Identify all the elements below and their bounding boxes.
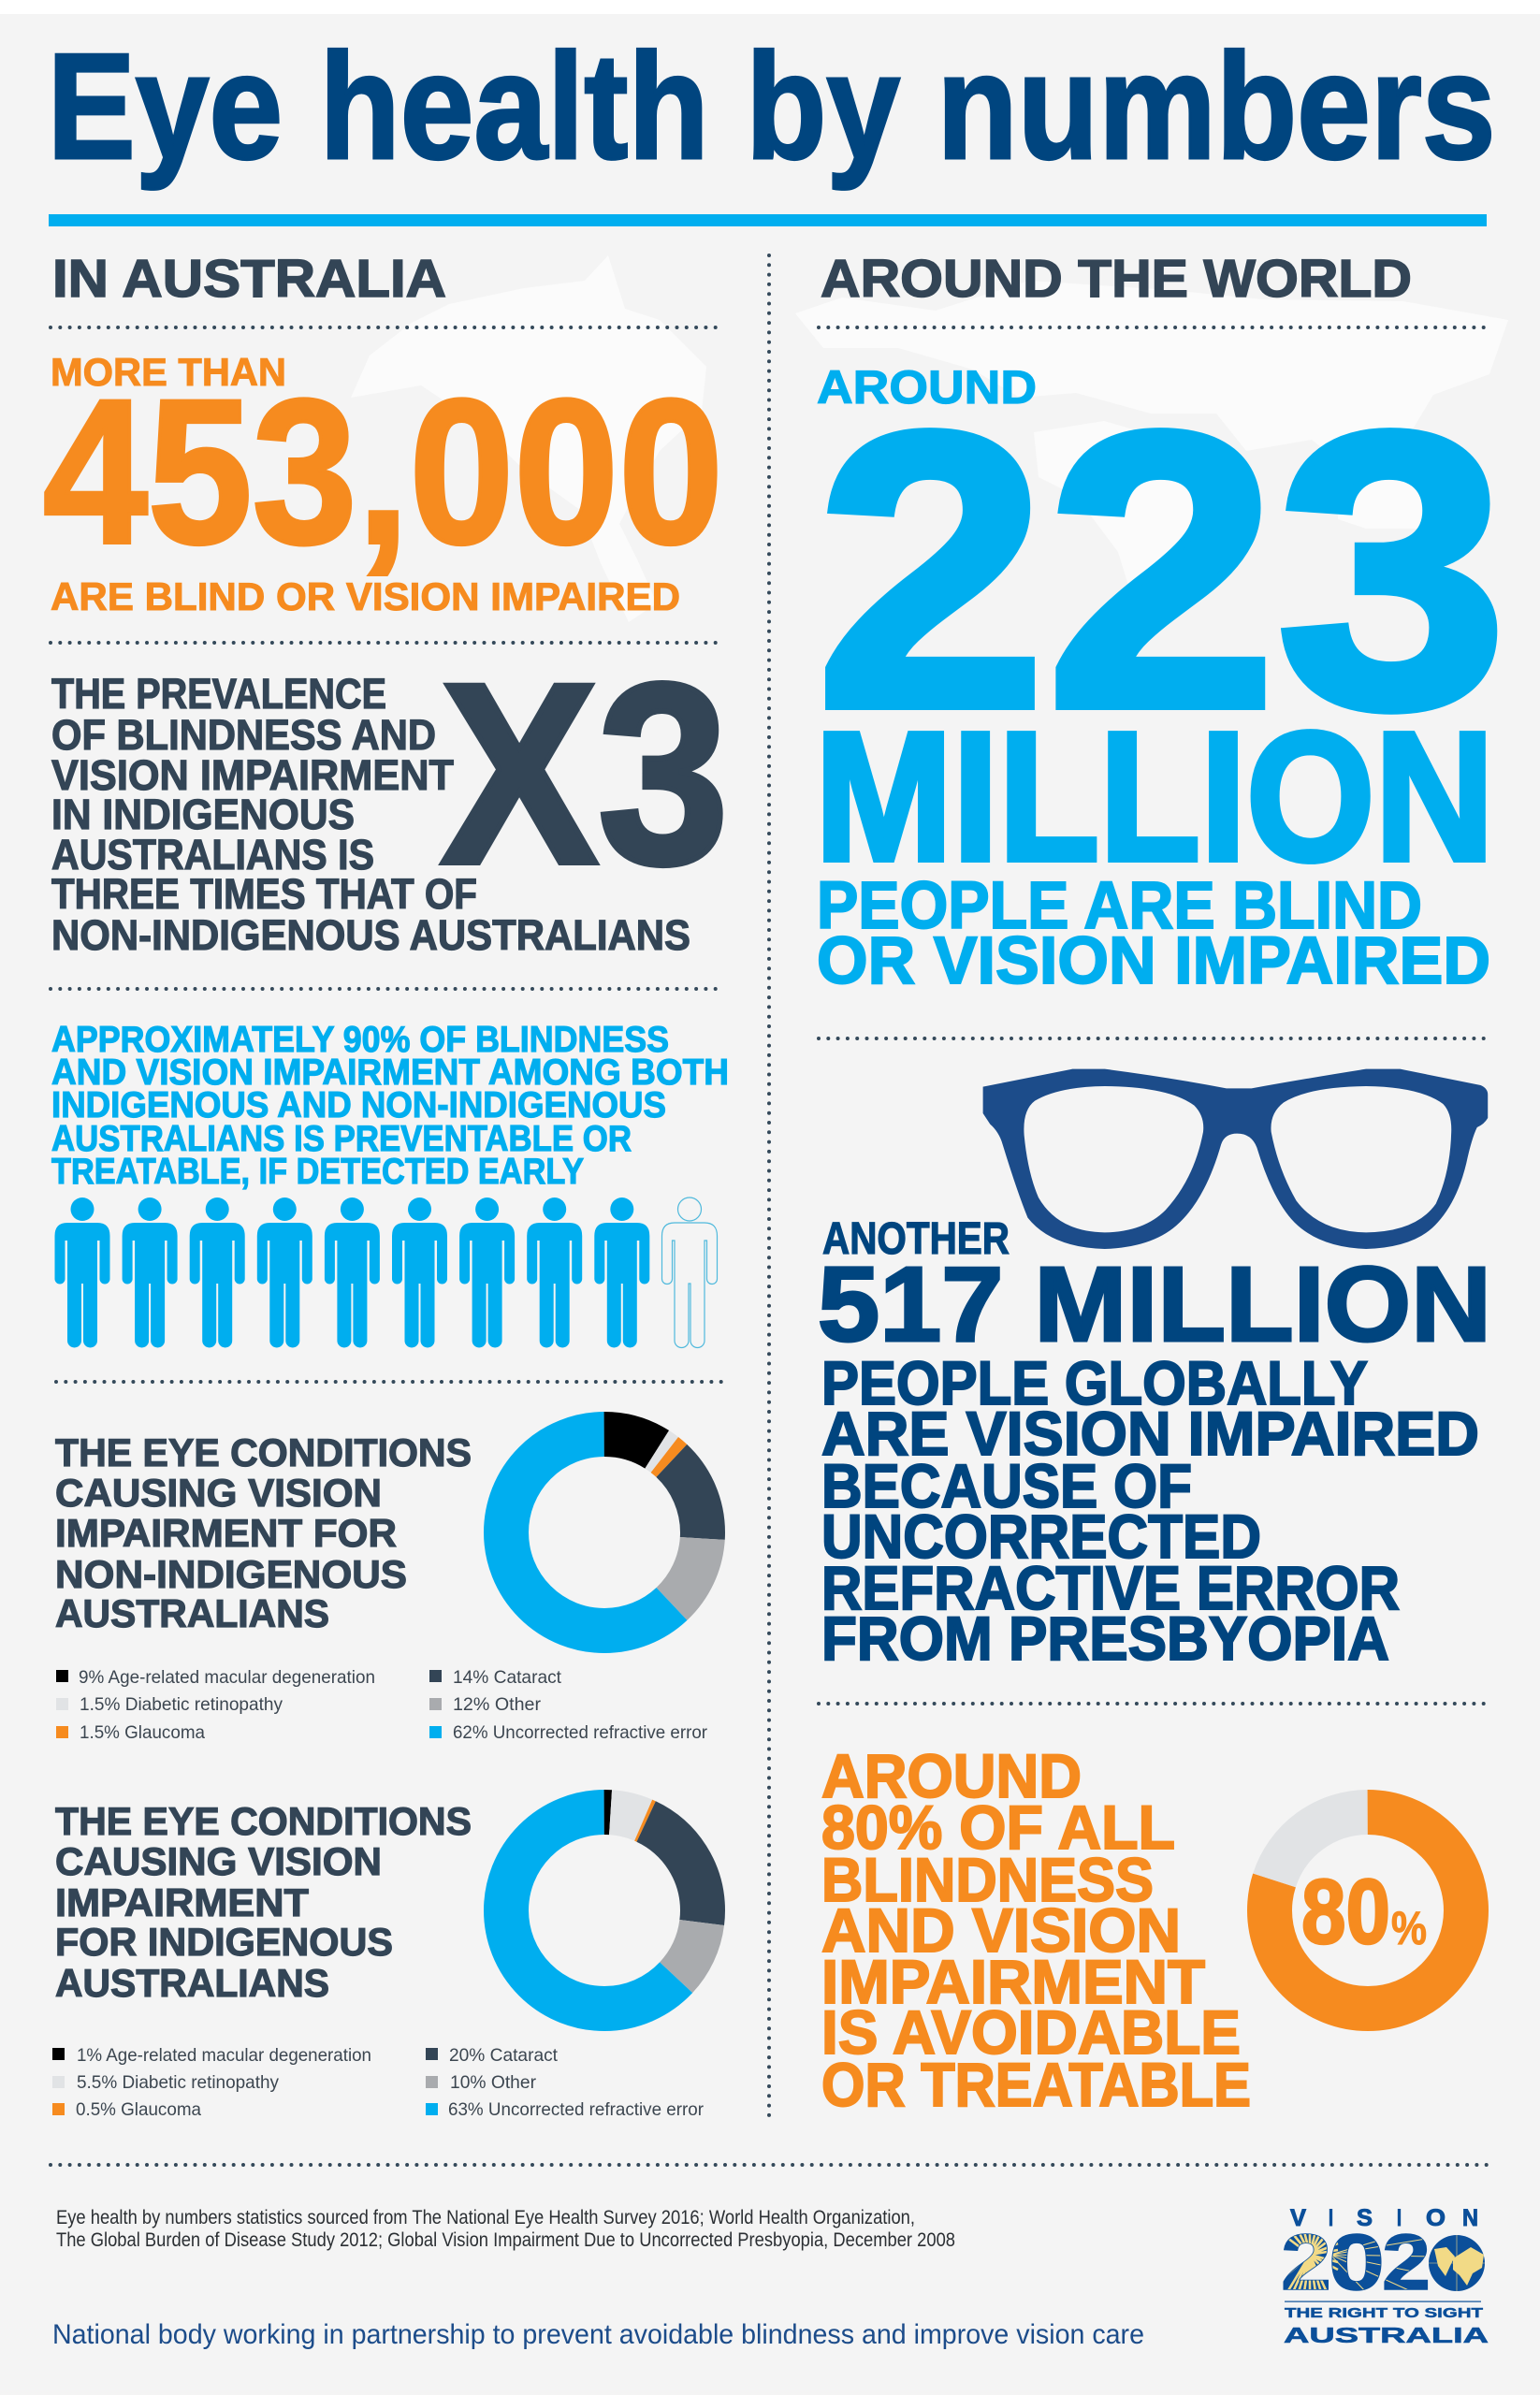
tagline: National body working in partnership to prevent avoidable blindness and improve vision care <box>52 2319 1144 2350</box>
text: prevalence in indigenous australians: NON-INDIGENOUS AUSTRALIANS <box>51 911 690 959</box>
stat: 223 million: 223 <box>816 352 1507 789</box>
logo: vision 2020 australia: THE RIGHT TO SIGHT <box>1285 2305 1483 2321</box>
stat: 517 million: REFRACTIVE ERROR <box>821 1553 1400 1622</box>
heading: conditions indigenous: IMPAIRMENT <box>55 1880 309 1924</box>
text: 80% avoidable: IS AVOIDABLE <box>821 1997 1241 2067</box>
stat: 517 million: ANOTHER <box>822 1214 1010 1264</box>
legend: non-indigenous: 12% Other <box>453 1694 542 1715</box>
logo: vision 2020 australia <box>1278 2205 1489 2347</box>
world map background <box>351 255 1508 622</box>
text: 80% avoidable: BLINDNESS <box>821 1845 1154 1914</box>
legend: non-indigenous: 1.5% Glaucoma <box>80 1722 205 1743</box>
legend: non-indigenous <box>56 1667 707 1743</box>
text: 80% avoidable: IMPAIRMENT <box>821 1947 1205 2016</box>
text: 90% preventable: INDIGENOUS AND NON-INDIGENOUS <box>51 1085 666 1125</box>
heading: conditions non-indigenous: CAUSING VISION <box>55 1471 382 1515</box>
heading: around the world: AROUND THE WORLD <box>821 249 1412 309</box>
logo: vision 2020 australia: S <box>1357 2205 1373 2231</box>
heading: in australia: IN AUSTRALIA <box>52 249 446 309</box>
legend: indigenous: 5.5% Diabetic retinopathy <box>77 2072 279 2093</box>
heading: conditions indigenous: THE EYE CONDITIONS <box>55 1799 472 1843</box>
text: 80% avoidable: AROUND <box>821 1741 1082 1810</box>
stat: 453,000 blind or vision impaired: MORE THAN <box>51 350 286 394</box>
icon: glasses <box>983 1069 1488 1249</box>
legend: indigenous: 10% Other <box>450 2072 536 2093</box>
donut chart: indigenous <box>506 1812 703 2009</box>
text: 80% avoidable <box>821 1741 1251 2119</box>
text: 90% preventable <box>51 1020 729 1192</box>
donut chart: 80%: 80 <box>1301 1860 1390 1963</box>
stat: 517 million <box>818 1214 1491 1673</box>
heading: conditions indigenous: FOR INDIGENOUS <box>55 1920 393 1964</box>
heading: conditions indigenous <box>55 1799 472 2005</box>
logo: vision 2020 australia: 0 <box>1329 2218 1385 2306</box>
logo: vision 2020 australia: N <box>1462 2205 1478 2231</box>
legend: non-indigenous: 62% Uncorrected refractive error <box>453 1722 707 1743</box>
legend: indigenous: 20% Cataract <box>449 2045 559 2066</box>
heading: conditions indigenous: CAUSING VISION <box>55 1839 382 1883</box>
stat: 223 million <box>815 352 1507 998</box>
text: 90% preventable: AND VISION IMPAIRMENT AMONG BOTH <box>51 1052 729 1093</box>
heading: conditions non-indigenous: THE EYE CONDITIONS <box>55 1430 472 1474</box>
heading: conditions non-indigenous: NON-INDIGENOUS <box>55 1552 407 1596</box>
stat: 453,000 blind or vision impaired: 453,000 <box>43 356 723 587</box>
legend: indigenous: 1% Age-related macular degeneration <box>77 2045 371 2066</box>
heading: conditions indigenous: AUSTRALIANS <box>55 1961 329 2005</box>
legend: indigenous: 63% Uncorrected refractive error <box>448 2099 704 2120</box>
stat: 223 million: OR VISION IMPAIRED <box>817 924 1490 998</box>
text: 80% avoidable: 80% OF ALL <box>821 1793 1175 1862</box>
logo: vision 2020 australia: AUSTRALIA <box>1284 2323 1489 2347</box>
source note <box>56 2207 955 2251</box>
legend: non-indigenous: 14% Cataract <box>453 1667 562 1688</box>
top white strip <box>0 0 1540 14</box>
donut chart: 80%: % <box>1391 1902 1427 1954</box>
logo: vision 2020 australia: 2 <box>1281 2218 1331 2306</box>
title rule <box>49 214 1487 226</box>
stat: x3: X3 <box>441 631 729 918</box>
donut chart: 80% <box>1270 1812 1466 2009</box>
text: 80% avoidable: AND VISION <box>821 1895 1181 1965</box>
legend: indigenous <box>52 2045 704 2120</box>
icon row: nine of ten people <box>54 1198 717 1347</box>
logo: vision 2020 australia: O <box>1426 2205 1446 2231</box>
text: 90% preventable: AUSTRALIANS IS PREVENTABLE OR <box>51 1119 632 1159</box>
text: 90% preventable: APPROXIMATELY 90% OF BLINDNESS <box>51 1020 669 1060</box>
logo: vision 2020 australia: I <box>1329 2205 1333 2231</box>
donut chart: non-indigenous <box>506 1434 703 1631</box>
logo: vision 2020 australia: I <box>1397 2205 1402 2231</box>
source note: Eye health by numbers statistics sourced from The National Eye Health Survey 2016; World Health Organization, <box>56 2207 915 2228</box>
stat: 517 million: ARE VISION IMPAIRED <box>821 1399 1479 1468</box>
logo: vision 2020 australia: V <box>1290 2205 1306 2231</box>
stat: 517 million: UNCORRECTED <box>821 1502 1261 1571</box>
stat: 517 million: 517 MILLION <box>818 1245 1491 1363</box>
text: prevalence in indigenous australians: VISION IMPAIRMENT <box>51 751 454 799</box>
stat: 223 million: AROUND <box>817 361 1037 414</box>
stat: 223 million: PEOPLE ARE BLIND <box>817 869 1422 943</box>
text: prevalence in indigenous australians: THE PREVALENCE <box>51 670 386 718</box>
text: 90% preventable: TREATABLE, IF DETECTED EARLY <box>51 1152 584 1192</box>
heading: conditions non-indigenous <box>55 1430 472 1635</box>
stat: 517 million: BECAUSE OF <box>821 1451 1192 1520</box>
legend: non-indigenous: 9% Age-related macular degeneration <box>79 1667 375 1688</box>
text: 80% avoidable: OR TREATABLE <box>821 2050 1251 2119</box>
text: prevalence in indigenous australians: THREE TIMES THAT OF <box>51 870 477 918</box>
column divider <box>767 255 771 2121</box>
text: prevalence in indigenous australians <box>51 670 690 959</box>
stat: 517 million: PEOPLE GLOBALLY <box>821 1348 1368 1417</box>
text: prevalence in indigenous australians: AUSTRALIANS IS <box>51 831 374 878</box>
legend: indigenous: 0.5% Glaucoma <box>76 2099 201 2120</box>
heading: conditions non-indigenous: AUSTRALIANS <box>55 1591 329 1635</box>
legend: non-indigenous: 1.5% Diabetic retinopathy <box>80 1694 283 1715</box>
logo: vision 2020 australia: 2 <box>1382 2218 1431 2306</box>
stat: 517 million: FROM PRESBYOPIA <box>821 1604 1389 1673</box>
stat: 453,000 blind or vision impaired: ARE BLIND OR VISION IMPAIRED <box>51 574 680 618</box>
text: prevalence in indigenous australians: OF BLINDNESS AND <box>51 711 436 759</box>
heading: conditions non-indigenous: IMPAIRMENT FOR <box>55 1511 397 1555</box>
source note: The Global Burden of Disease Study 2012; Global Vision Impairment Due to Uncorrected Presbyopia, December 2008 <box>56 2229 955 2251</box>
text: prevalence in indigenous australians: IN INDIGENOUS <box>51 791 355 838</box>
